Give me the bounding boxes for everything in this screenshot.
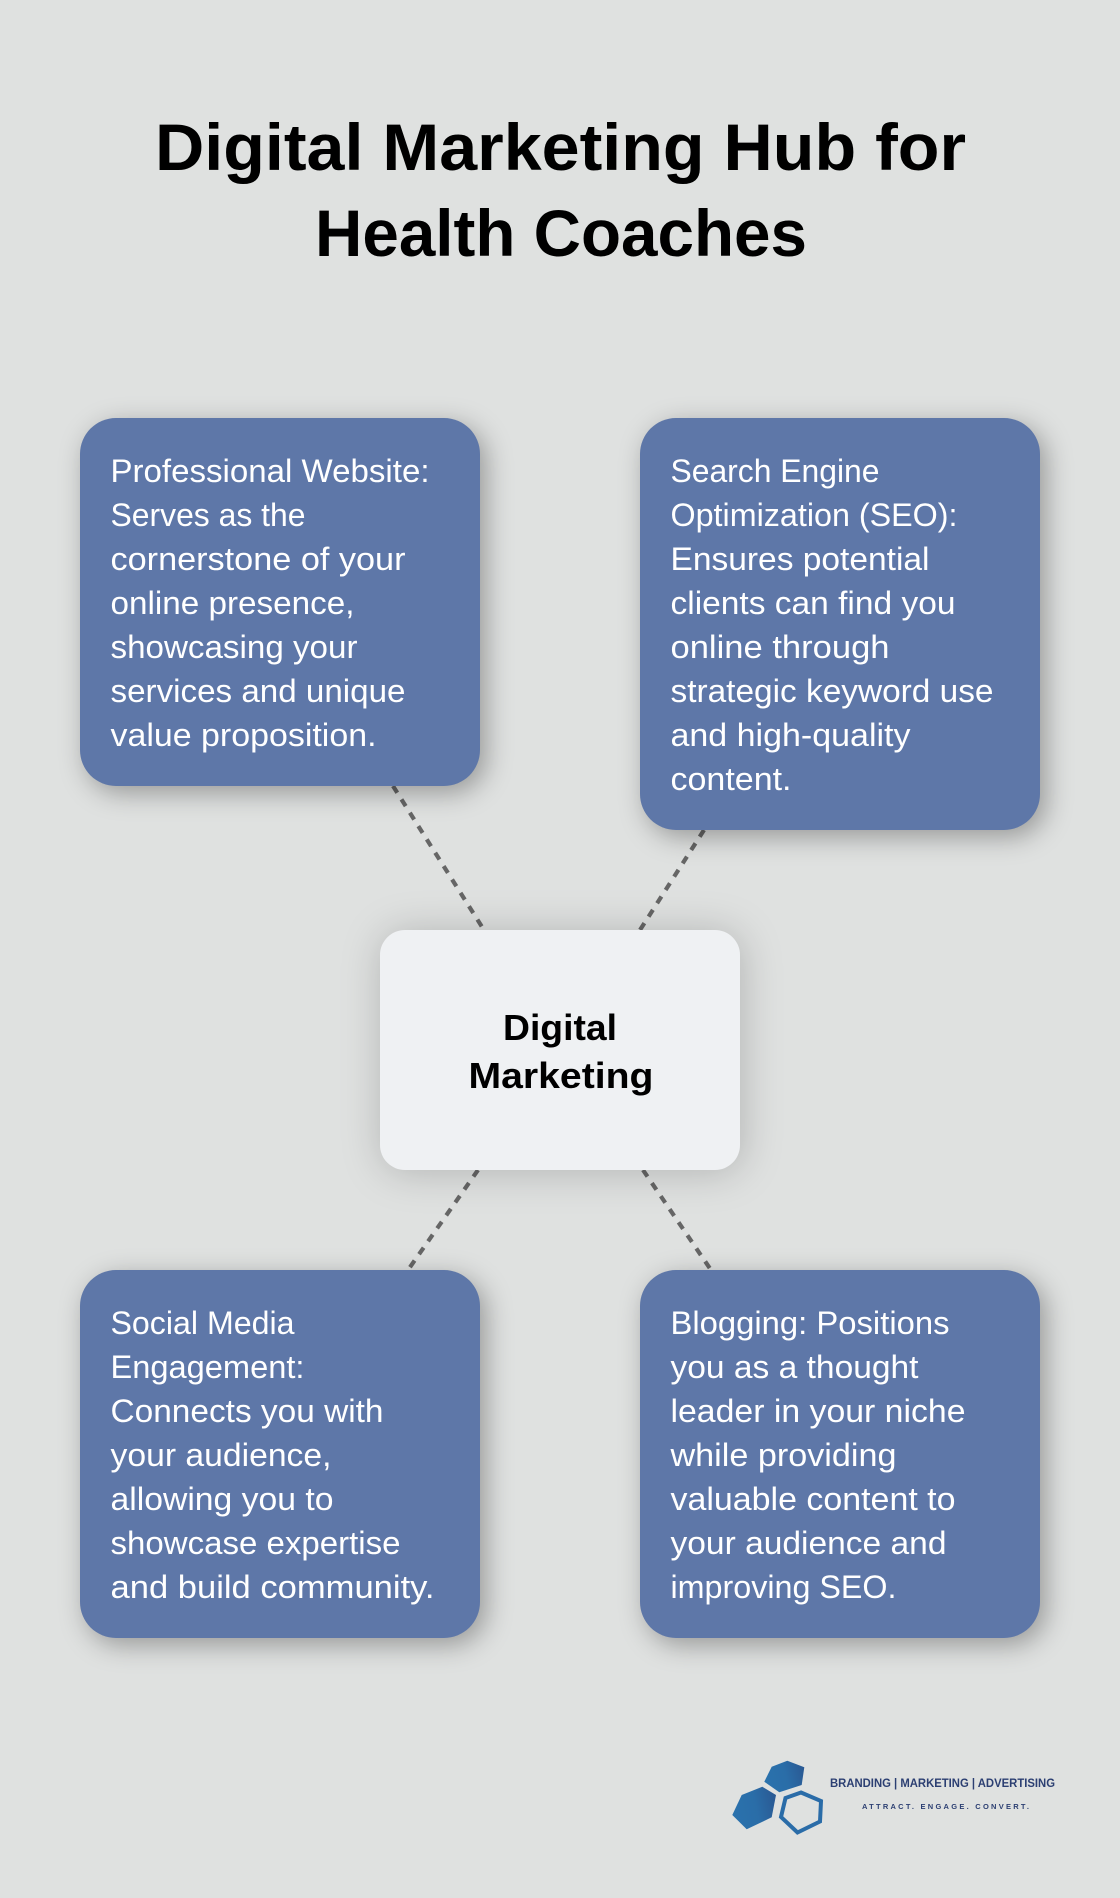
- panel: blogging: you as a thought: [670, 1349, 918, 1385]
- icon: outlined hexagon: [781, 1792, 821, 1832]
- panel: social media engagement: [80, 1270, 480, 1638]
- panel: search engine optimization: [640, 418, 1040, 830]
- panel: search engine optimization: online through: [670, 629, 890, 665]
- panel: blogging: improving SEO.: [670, 1569, 896, 1605]
- panel: blogging: [640, 1270, 1040, 1638]
- icon: filled hexagon left: [732, 1787, 776, 1829]
- panel: search engine optimization: content.: [670, 761, 792, 797]
- panel: blogging: your audience and: [670, 1525, 946, 1561]
- panel: social media engagement: showcase expertise: [110, 1525, 400, 1561]
- title: Health Coaches: [315, 196, 807, 270]
- panel: search engine optimization: clients can find you: [670, 585, 956, 621]
- panel: search engine optimization: Ensures potential: [670, 541, 930, 577]
- icon: filled hexagon top: [764, 1761, 804, 1792]
- panel: search engine optimization: Search Engine: [670, 453, 880, 489]
- dashed connectors: [393, 786, 711, 1270]
- panel: professional website: value proposition.: [110, 717, 376, 753]
- panel: blogging: while providing: [669, 1437, 896, 1473]
- panel: professional website: cornerstone of your: [110, 541, 406, 577]
- panel: central hub: [380, 930, 740, 1170]
- panel: search engine optimization: strategic keyword use: [670, 673, 994, 709]
- panel: social media engagement: and build community.: [110, 1569, 434, 1605]
- panel: central hub: Marketing: [468, 1055, 654, 1096]
- logo text: tagline: ATTRACT. ENGAGE. CONVERT.: [862, 1802, 1029, 1811]
- logo: [732, 1761, 1055, 1832]
- panel: social media engagement: allowing you to: [110, 1481, 334, 1517]
- panel: social media engagement: Social Media: [110, 1305, 295, 1341]
- title: Digital Marketing Hub for: [155, 110, 966, 184]
- panel: central hub: Digital: [503, 1007, 617, 1048]
- panel: professional website: [80, 418, 480, 786]
- logo text: services: BRANDING | MARKETING | ADVERTISING: [830, 1778, 1055, 1790]
- panel: search engine optimization: and high-quality: [670, 717, 911, 753]
- panel: blogging: valuable content to: [670, 1481, 956, 1517]
- panel: blogging: leader in your niche: [670, 1393, 966, 1429]
- panel: social media engagement: Connects you with: [110, 1393, 384, 1429]
- panel: social media engagement: Engagement:: [110, 1349, 304, 1385]
- panel: social media engagement: your audience,: [110, 1437, 332, 1473]
- panel: professional website: Professional Website:: [110, 453, 430, 489]
- title: [155, 110, 966, 270]
- panel: professional website: showcasing your: [110, 629, 358, 665]
- panel: professional website: Serves as the: [110, 497, 306, 533]
- panel: search engine optimization: Optimization (SEO):: [670, 497, 958, 533]
- panel: professional website: services and unique: [110, 673, 406, 709]
- panel: blogging: Blogging: Positions: [670, 1305, 950, 1341]
- panel: professional website: online presence,: [110, 585, 354, 621]
